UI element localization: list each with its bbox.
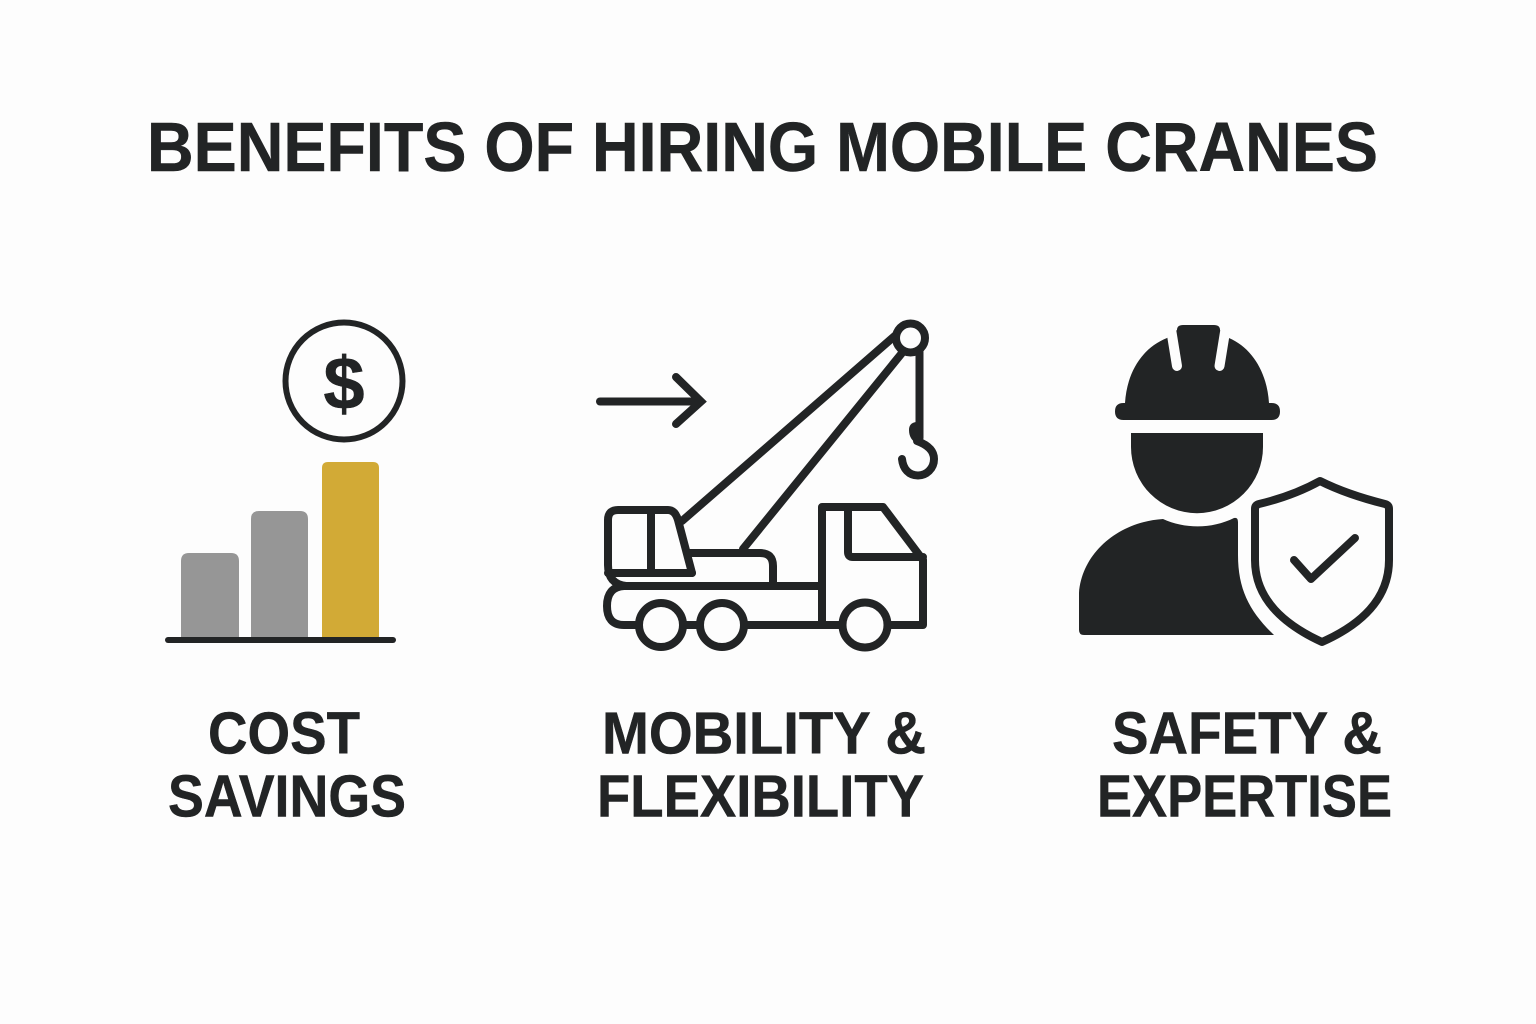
hard hat	[1115, 325, 1280, 420]
icon: arrow	[600, 377, 701, 424]
label: mobility and flexibility: MOBILITY &	[602, 700, 926, 766]
panel: mobility and flexibility	[597, 324, 934, 830]
label: cost savings: COST	[208, 700, 360, 766]
label: safety and expertise: EXPERTISE	[1097, 764, 1392, 830]
panel: cost savings	[165, 322, 406, 830]
label: safety and expertise	[1097, 700, 1392, 830]
label: cost savings	[168, 700, 406, 830]
label: safety and expertise: SAFETY &	[1112, 700, 1382, 766]
icon: dollar coin: $	[323, 342, 365, 425]
bar chart	[165, 462, 396, 643]
body	[1079, 518, 1274, 635]
icon: worker	[1079, 325, 1280, 635]
head	[1131, 433, 1263, 513]
panel: safety and expertise	[1079, 325, 1392, 830]
icon: shield with check	[1255, 481, 1389, 642]
label: cost savings: SAVINGS	[168, 764, 406, 830]
label: mobility and flexibility	[597, 700, 926, 830]
title: BENEFITS OF HIRING MOBILE CRANES	[147, 108, 1378, 186]
icon: mobile crane	[607, 324, 934, 648]
icon: dollar coin	[286, 322, 402, 440]
label: mobility and flexibility: FLEXIBILITY	[597, 764, 924, 830]
